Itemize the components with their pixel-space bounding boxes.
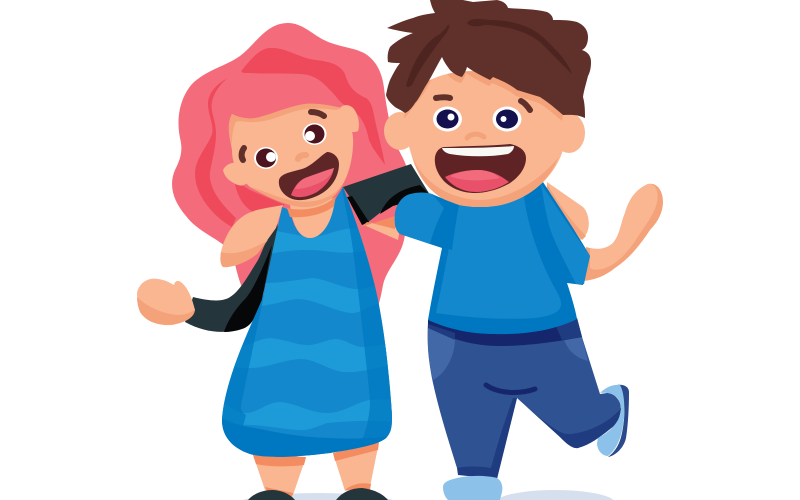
- girl ears: [223, 163, 248, 186]
- boy hair: [386, 0, 591, 118]
- boy mouth: [435, 144, 526, 193]
- dress side panels: [222, 187, 392, 448]
- girl eyebrows: [242, 112, 324, 160]
- girl: [137, 23, 410, 500]
- girl left sleeve and arm: [185, 215, 281, 332]
- boy: [343, 0, 663, 500]
- dress wave bands: [222, 228, 394, 430]
- girl legs: [253, 442, 379, 497]
- dress hem: [222, 418, 388, 457]
- girl back arm: [366, 222, 400, 240]
- girl head: [223, 104, 359, 207]
- boy raised arm: [545, 182, 663, 281]
- girl dress: [222, 187, 392, 457]
- boy shoes: [443, 385, 629, 500]
- girl neck: [287, 196, 336, 238]
- girl shoulder: [220, 205, 283, 267]
- boy ears: [384, 112, 416, 150]
- girl hair: [172, 23, 410, 312]
- girl nose: [298, 155, 306, 159]
- girl shoes: [248, 488, 388, 500]
- ground shadows: [240, 490, 615, 500]
- girl left hand: [137, 279, 195, 325]
- boy head: [384, 0, 591, 207]
- boy sleeve front: [395, 192, 459, 250]
- boy forehead shadow: [404, 71, 563, 121]
- girl mouth: [279, 152, 339, 200]
- boy shirt: [395, 182, 590, 334]
- boy chin shadow: [412, 156, 558, 207]
- boy eyes: [433, 106, 522, 132]
- illustration: two children: [137, 0, 663, 500]
- boy eyebrows: [436, 97, 530, 110]
- boy nose: [467, 134, 484, 138]
- boy jeans: [428, 318, 621, 479]
- girl eyes: [254, 123, 326, 169]
- boy arm sleeve around girl: [343, 164, 430, 229]
